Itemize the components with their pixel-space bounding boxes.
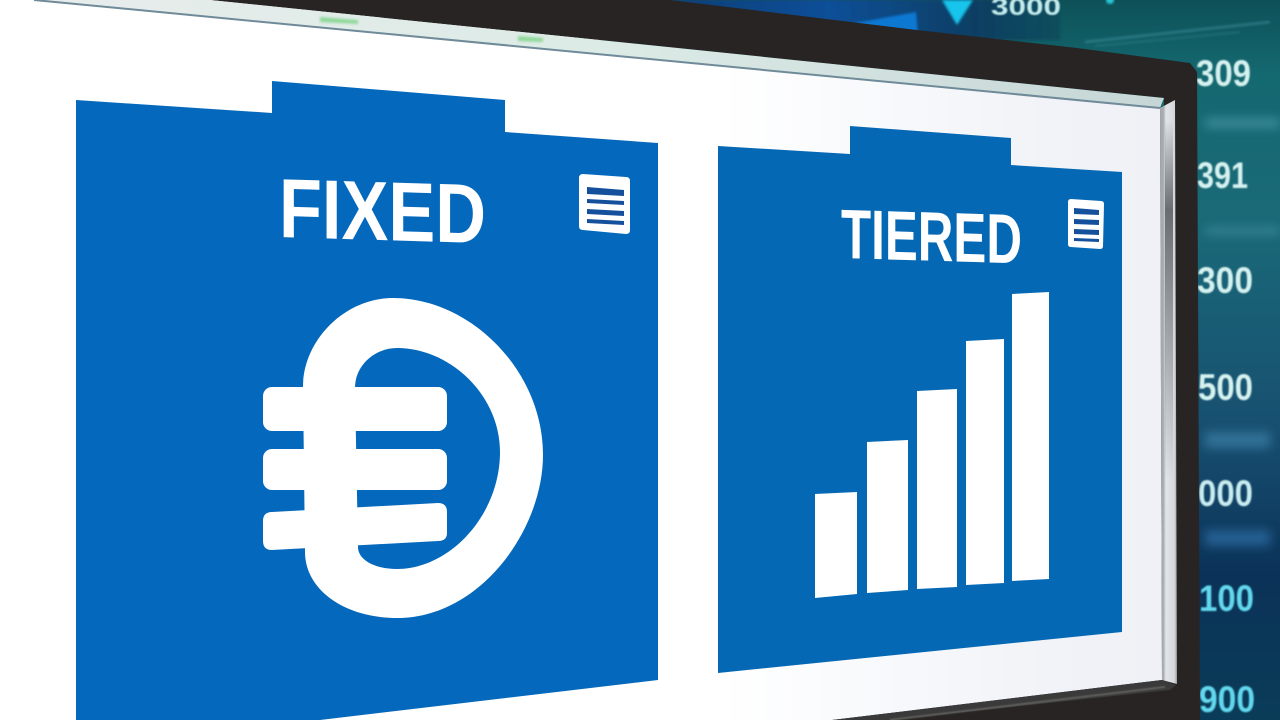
screen right chrome edge <box>1160 100 1177 684</box>
background axis numbers: 300 <box>1197 260 1253 301</box>
title: TIERED: TIERED <box>841 195 1022 278</box>
title: FIXED: FIXED <box>279 161 486 261</box>
panel: tiered <box>718 126 1122 673</box>
icon: euro symbol <box>263 298 543 618</box>
panel: fixed <box>76 81 658 720</box>
background axis numbers: 000 <box>1198 473 1253 514</box>
background axis numbers: 500 <box>1198 367 1253 408</box>
background dot <box>1106 0 1114 4</box>
icon: document <box>1068 199 1104 249</box>
background blob: blurred blue label <box>850 12 918 34</box>
background axis numbers: 100 <box>1199 578 1254 619</box>
background icon: teal marker <box>942 0 973 25</box>
bar chart: rising tiers <box>815 292 1049 598</box>
background axis numbers: 900 <box>1199 679 1255 720</box>
screen top edge highlight <box>34 0 1164 108</box>
background axis numbers <box>1196 53 1255 720</box>
icon: document <box>579 174 630 234</box>
background axis numbers: 309 <box>1196 53 1251 94</box>
background: teal data screen <box>600 0 1280 720</box>
monitor bezel <box>210 0 1200 720</box>
background axis numbers: 391 <box>1197 155 1248 196</box>
